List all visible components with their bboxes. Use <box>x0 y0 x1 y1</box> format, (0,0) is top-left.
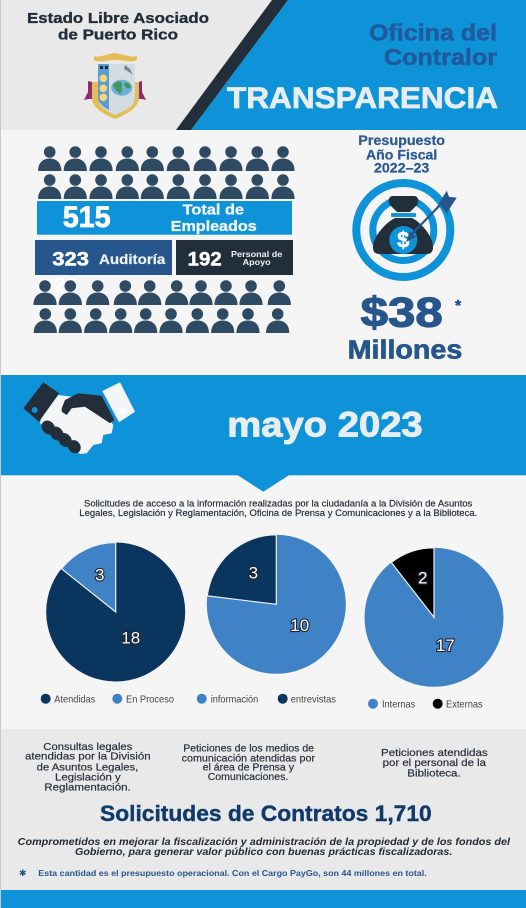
icon group: people bottom <box>33 280 291 333</box>
pie chart: internas <box>364 548 504 687</box>
text block: solicitudes de acceso <box>79 499 477 518</box>
text block: solicitudes de acceso: Solicitudes de acceso a la información realizadas por la ciudadanía a la División de Asuntos <box>84 499 473 509</box>
text block: compromiso: Gobierno, para generar valor público con buenas prácticas fiscalizadoras. <box>75 846 452 858</box>
pie chart: informacion: 10 <box>290 616 309 635</box>
heading: presupuesto: Año Fiscal <box>366 147 437 162</box>
heading: Estado Libre Asociado <box>27 10 209 43</box>
legend: internas <box>368 698 483 710</box>
footnote: Esta cantidad es el presupuesto operacional. Con el Cargo PayGo, son 44 millones en total. <box>38 869 427 878</box>
legend: informacion <box>197 694 336 706</box>
panel: personal de apoyo: 192 <box>188 249 222 271</box>
icon group: people top <box>38 146 295 199</box>
panel: bottom notes <box>1 729 526 890</box>
heading: Oficina del Contralor <box>369 20 497 70</box>
panel: auditoria: Auditoría <box>99 252 166 267</box>
legend: atendidas <box>41 694 174 706</box>
text block: consultas legales: de Asuntos Legales, <box>37 762 138 774</box>
text block: consultas legales <box>25 741 151 794</box>
heading: presupuesto: 2022–23 <box>374 161 430 176</box>
text block: peticiones medios: el área de Prensa y <box>203 762 295 774</box>
panel: auditoria: 323 <box>52 249 89 271</box>
heading: solicitudes de contratos: Solicitudes de Contratos 1,710 <box>100 801 432 826</box>
legend: internas: Internas <box>382 698 415 710</box>
text block: peticiones medios: Peticiones de los medios de <box>183 743 314 755</box>
text block: peticiones biblioteca: por el personal de la <box>383 757 486 769</box>
heading: Estado Libre Asociado: Estado Libre Asociado <box>27 10 209 27</box>
heading: Estado Libre Asociado: de Puerto Rico <box>58 26 178 43</box>
footnote: ✱ <box>19 869 27 879</box>
text block: peticiones biblioteca: Peticiones atendidas <box>381 747 488 759</box>
legend: atendidas: En Proceso <box>126 694 174 706</box>
heading: presupuesto: Presupuesto <box>358 133 445 148</box>
stat: $38 Millones: * <box>455 297 461 314</box>
stat: $38 Millones: $38 <box>361 289 443 336</box>
text block: solicitudes de acceso: Legales, Legislación y Reglamentación, Oficina de Prensa y Comunicaciones y a la Biblioteca. <box>79 508 477 518</box>
header banner <box>1 0 526 130</box>
panel: total de empleados: Total de <box>183 202 244 218</box>
panel: auditoria <box>35 240 172 275</box>
legend: informacion: información <box>211 694 258 706</box>
text block: peticiones biblioteca <box>381 747 488 780</box>
legend: informacion: entrevistas <box>291 694 336 706</box>
heading: presupuesto <box>358 133 445 176</box>
heading: Oficina del Contralor: Oficina del <box>369 20 497 46</box>
panel: personal de apoyo: Personal de <box>231 249 283 259</box>
text block: consultas legales: Consultas legales <box>43 741 132 753</box>
icon: handshake <box>23 382 135 456</box>
icon: money bag target <box>356 183 457 277</box>
panel: total de empleados: Empleados <box>171 219 257 235</box>
pie chart: atendidas <box>46 542 185 682</box>
text block: consultas legales: atendidas por la División <box>25 750 151 762</box>
icon: crest <box>84 53 146 119</box>
panel: personal de apoyo <box>176 240 293 275</box>
text block: peticiones medios <box>182 743 316 783</box>
pie chart: informacion <box>207 535 346 674</box>
pie chart: atendidas: 3 <box>95 565 104 584</box>
text block: peticiones biblioteca: Biblioteca. <box>407 768 461 780</box>
footer bar <box>1 890 526 908</box>
banner: mayo 2023 <box>1 375 526 492</box>
pie chart: internas: 2 <box>418 569 427 588</box>
text block: compromiso: Comprometidos en mejorar la fiscalización y administración de la propiedad y de los fondos del <box>18 836 511 848</box>
banner: mayo 2023: mayo 2023 <box>227 406 423 445</box>
pie chart: internas: 17 <box>436 636 455 655</box>
text block: peticiones medios: Comunicaciones. <box>208 771 288 783</box>
title: TRANSPARENCIA: TRANSPARENCIA <box>227 82 498 115</box>
panel: total de empleados: 515 <box>63 201 111 234</box>
pie chart: atendidas: 18 <box>121 629 140 648</box>
text block: peticiones medios: comunicación atendidas por <box>182 753 316 765</box>
stat: $38 Millones: Millones <box>348 336 462 364</box>
stat: $38 Millones <box>348 289 462 364</box>
panel: total de empleados <box>37 201 292 235</box>
text block: compromiso <box>18 836 511 858</box>
text block: consultas legales: Reglamentación. <box>44 782 131 794</box>
text block: consultas legales: Legislación y <box>55 772 122 784</box>
panel: personal de apoyo: Apoyo <box>243 257 271 267</box>
legend: internas: Externas <box>446 698 483 710</box>
heading: Oficina del Contralor: Contralor <box>384 44 497 70</box>
icon: money bag target: $ <box>397 228 409 252</box>
pie chart: informacion: 3 <box>249 563 258 582</box>
legend: atendidas: Atendidas <box>54 694 95 706</box>
ghost number: 323 <box>40 275 78 297</box>
